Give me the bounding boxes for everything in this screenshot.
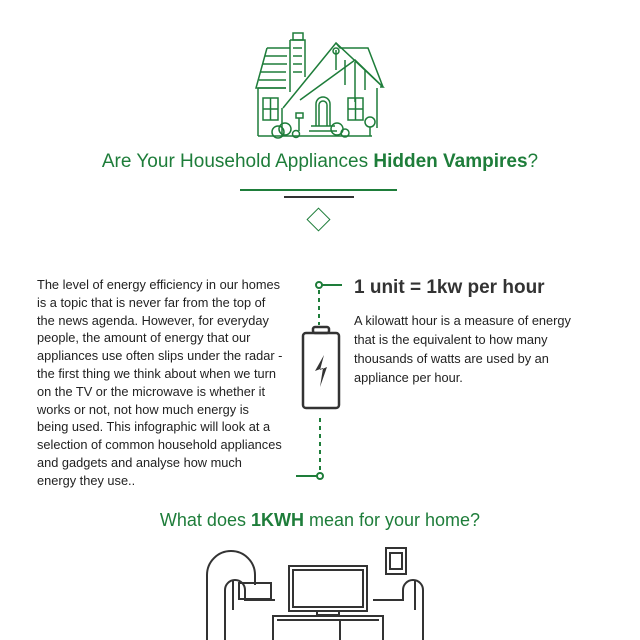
- text: kilowatt explanation: appliance per hour.: [354, 370, 463, 385]
- intro text: appliances use often slips under the radar -: [37, 348, 282, 363]
- icon: battery with dotted connector: [296, 281, 342, 480]
- text: kilowatt explanation: that is the equivalent to how many: [354, 332, 548, 347]
- intro text: [37, 277, 282, 488]
- intro text: the news agenda. However, for everyday: [37, 313, 269, 328]
- title: Are Your Household Appliances Hidden Vampires?: [102, 151, 538, 172]
- intro text: the first thing we think about when we turn: [37, 366, 276, 381]
- intro text: energy they use..: [37, 473, 135, 488]
- intro text: and gadgets and analyse how much: [37, 455, 242, 470]
- intro text: being used. This infographic will look at a: [37, 419, 270, 434]
- text: kilowatt explanation: [354, 313, 571, 385]
- heading: unit: 1 unit = 1kw per hour: [354, 277, 545, 298]
- intro text: is a topic that is never far from the top of: [37, 295, 265, 310]
- intro text: The level of energy efficiency in our homes: [37, 277, 280, 292]
- intro text: selection of common household appliances: [37, 437, 282, 452]
- icon: diamond: [306, 207, 331, 232]
- icon: house: [255, 32, 385, 139]
- icon: living room: [206, 547, 424, 640]
- text: kilowatt explanation: thousands of watts are used by an: [354, 351, 549, 366]
- subheading: What does 1KWH mean for your home?: [160, 510, 480, 530]
- intro text: works or not, not how much energy is: [37, 402, 249, 417]
- text: kilowatt explanation: A kilowatt hour is a measure of energy: [354, 313, 571, 328]
- intro text: on the TV or the microwave is whether it: [37, 384, 265, 399]
- divider lines: [240, 189, 397, 191]
- intro text: people, the amount of energy that our: [37, 330, 250, 345]
